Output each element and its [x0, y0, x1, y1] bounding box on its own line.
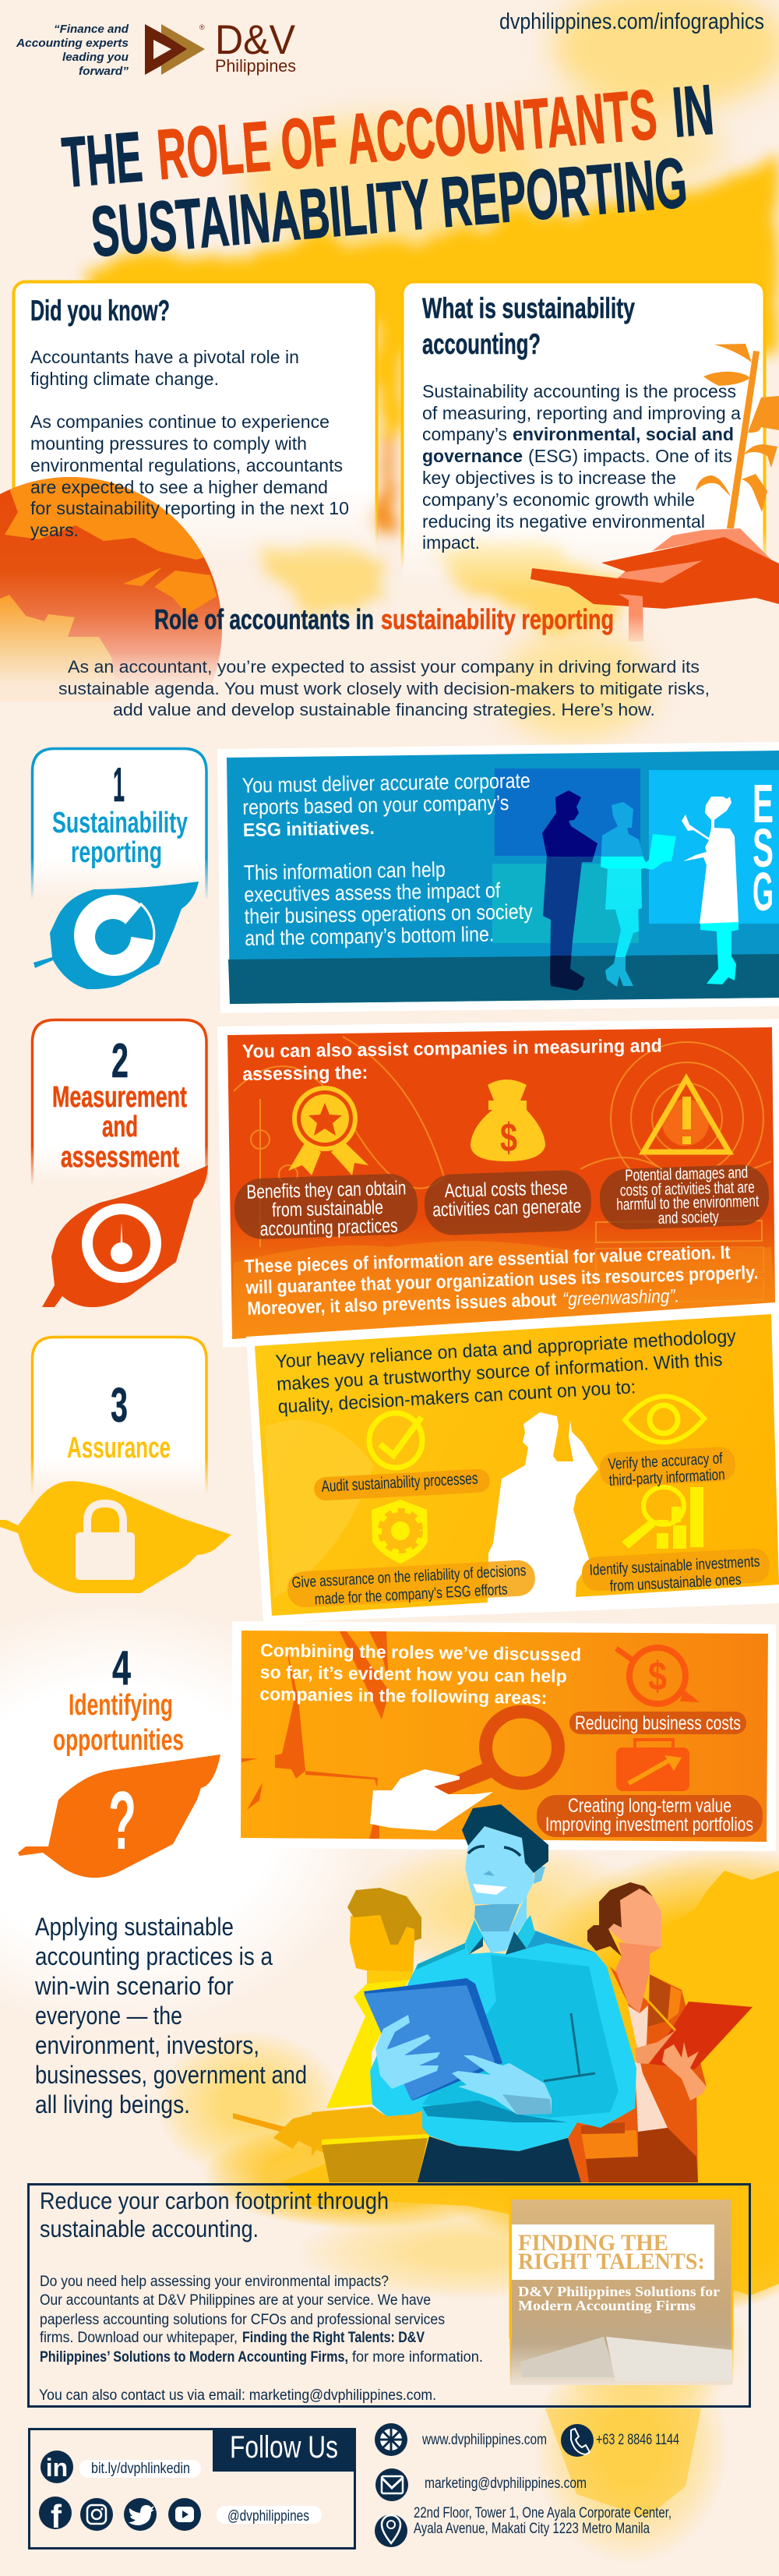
text: did you know: fighting climate change. — [30, 369, 219, 389]
panel: what is sustainability accounting card — [402, 282, 765, 610]
text: did you know: Did you know? — [30, 295, 170, 327]
closing statement — [34, 1913, 307, 2118]
pill: potential damages: and society — [657, 1208, 719, 1228]
icon: warning triangle — [643, 1079, 729, 1152]
person: main man in cyan shirt — [364, 1804, 636, 2182]
cta body: Finding the Right Talents: D&V — [242, 2330, 425, 2346]
panel 3 text — [275, 1326, 739, 1418]
heading: role of accountants: Role of accountants in — [154, 603, 374, 635]
cta body: Do you need help assessing your environmental impacts? — [40, 2274, 389, 2290]
icon: twitter — [124, 2498, 157, 2531]
text: what is sustainability accounting: environmental, social and — [513, 424, 734, 444]
decorative circuit lines — [234, 1037, 771, 1303]
whitepaper cover: Modern Accounting Firms — [518, 2298, 696, 2313]
cta body: for more information. — [352, 2349, 483, 2366]
panel 4: identifying opportunities — [232, 1621, 776, 1851]
panel 2 closing text: “greenwashing”. — [562, 1285, 680, 1310]
text: what is sustainability accounting: key objectives is to increase the — [422, 468, 676, 488]
section 4 heading: identifying opportunities: 4 — [112, 1641, 131, 1695]
panel: did you know card — [14, 282, 377, 594]
esg letters — [753, 773, 774, 922]
text: what is sustainability accounting — [422, 292, 741, 553]
icon: magnifier with bars — [622, 1487, 703, 1549]
pill: long-term value: Creating long-term value — [568, 1795, 731, 1817]
icon: orange leaf with question mark — [18, 1754, 220, 1878]
pill: verify: Verify the accuracy of — [608, 1450, 723, 1473]
figure: woman silhouette white — [682, 797, 738, 984]
section 1 tab: sustainability reporting: 1 — [113, 758, 125, 812]
whitepaper cover: FINDING THE — [518, 2230, 668, 2256]
cta body: You can also contact us via email: marketing@dvphilippines.com. — [39, 2387, 436, 2404]
whitepaper cover: RIGHT TALENTS: — [518, 2249, 705, 2274]
logo tagline: leading you — [62, 51, 129, 64]
figure: white silhouette — [488, 1412, 598, 1603]
cta heading: Reduce your carbon footprint through — [40, 2187, 389, 2214]
cta heading — [40, 2187, 389, 2242]
panel 2 closing text: Moreover, it also prevents issues about — [247, 1289, 557, 1320]
neck — [480, 1894, 527, 1952]
logo: D&V Philippines: Philippines — [215, 56, 296, 76]
panel 2: measurement and assessment — [217, 1019, 779, 1348]
panel 1 text: executives assess the impact of — [244, 878, 501, 906]
pants — [418, 2136, 581, 2182]
text: what is sustainability accounting: reducing its negative environmental — [422, 511, 705, 532]
panel 1 text — [242, 769, 534, 950]
section 3 tab: assurance: Assurance — [67, 1432, 171, 1465]
logo: D&V Philippines: ® — [199, 23, 205, 31]
section 4 heading: identifying opportunities — [53, 1641, 184, 1757]
panel 1 text: reports based on your company’s — [242, 791, 509, 819]
panel 2 heading: You can also assist companies in measuring and — [242, 1035, 662, 1062]
panel 4 text: so far, it’s evident how you can help — [260, 1662, 567, 1686]
icon: check circle — [369, 1413, 422, 1468]
icon: yellow leaf with lock — [0, 1481, 231, 1593]
contact: phone — [561, 2424, 679, 2457]
heading: role of accountants: sustainability reporting — [381, 603, 614, 635]
intro paragraph — [58, 657, 710, 719]
pill: identify — [581, 1548, 770, 1596]
panel: follow us — [30, 2428, 355, 2549]
contact: website — [375, 2423, 547, 2456]
cta body: Our accountants at D&V Philippines are at your service. We have — [40, 2292, 431, 2309]
section 2 tab: measurement and assessment: 2 — [111, 1034, 129, 1088]
icon: linkedin — [41, 2451, 73, 2483]
contact: email — [375, 2468, 587, 2501]
pill: actual costs: activities can generate — [432, 1195, 582, 1221]
panel 4 text: Combining the roles we’ve discussed — [260, 1640, 581, 1665]
cta body: paperless accounting solutions for CFOs and professional services — [40, 2312, 445, 2328]
contact: email: marketing@dvphilippines.com — [425, 2475, 587, 2492]
pill: long-term value — [537, 1795, 763, 1837]
head — [534, 1867, 545, 1884]
logo tagline: Accounting experts — [16, 37, 129, 50]
text: did you know: environmental regulations, accountants — [30, 455, 343, 475]
panel 4 text: companies in the following areas: — [259, 1684, 547, 1708]
contact: phone: +63 2 8846 1144 — [596, 2432, 679, 2448]
person: woman in orange jacket — [568, 1882, 753, 2182]
illustration: globe — [0, 468, 226, 701]
text: did you know: As companies continue to experience — [30, 412, 330, 432]
icon: red leaf with dial — [42, 1165, 208, 1307]
closing statement: accounting practices is a — [35, 1942, 273, 1970]
icon: linkedin: in — [46, 2454, 68, 2482]
person: yellow man — [233, 1888, 429, 2182]
panel 2 heading — [242, 1035, 662, 1085]
pill: benefits: from sustainable — [272, 1196, 383, 1221]
section 1 tab: sustainability reporting — [33, 748, 206, 904]
panel 3 text: Your heavy reliance on data and appropriate methodology — [275, 1326, 736, 1373]
text: what is sustainability accounting: governance — [422, 446, 523, 466]
icon: facebook — [39, 2496, 72, 2535]
panel 1 text: their business operations on society — [245, 900, 533, 928]
icon: shield with gear — [372, 1500, 428, 1564]
tablet — [364, 1978, 502, 2101]
panel 3: assurance — [246, 1303, 779, 1623]
panel 4 text — [259, 1640, 581, 1708]
text: what is sustainability accounting: impact. — [422, 532, 480, 553]
text: did you know: are expected to see a higher demand — [30, 477, 328, 497]
text: did you know: Accountants have a pivotal role in — [30, 347, 299, 367]
cta body: firms. Download our whitepaper, — [40, 2330, 238, 2346]
section 1 tab: sustainability reporting: Sustainability — [52, 807, 188, 839]
pill: audit — [313, 1468, 491, 1501]
icon: eye — [625, 1396, 704, 1443]
icon: blue leaf with gauge — [33, 882, 199, 989]
section 4 heading: identifying opportunities: Identifying — [69, 1689, 173, 1722]
icon: money bag: $ — [500, 1115, 517, 1161]
pill: give assurance: Give assurance on the reliability of decisions — [291, 1562, 527, 1592]
panel 1 text: This information can help — [244, 857, 446, 885]
icon: coin with down arrow: $ — [648, 1654, 667, 1699]
icon: magnifier — [432, 1712, 558, 1794]
pill: benefits — [234, 1173, 418, 1241]
section 3 tab: assurance: 3 — [111, 1379, 128, 1433]
closing statement: win-win scenario for — [34, 1972, 234, 2000]
icon: medal — [288, 1086, 368, 1175]
link: handle pill: @dvphilippines — [227, 2508, 309, 2525]
panel 1 text: You must deliver accurate corporate — [242, 769, 530, 797]
hand — [652, 528, 771, 560]
cta heading: sustainable accounting. — [40, 2215, 259, 2242]
pill: audit: Audit sustainability processes — [321, 1470, 478, 1496]
whitepaper cover — [510, 2198, 732, 2385]
text: what is sustainability accounting: of measuring, reporting and improving a — [422, 403, 741, 423]
logo tagline: “Finance and — [54, 23, 129, 36]
text: what is sustainability accounting: (ESG) impacts. One of its — [528, 446, 732, 466]
closing statement: Applying sustainable — [35, 1913, 234, 1941]
icon: facebook: f — [51, 2498, 62, 2535]
pill: verify: third-party information — [608, 1466, 725, 1489]
closing statement: all living beings. — [35, 2090, 190, 2118]
pill: actual costs: Actual costs these — [444, 1177, 568, 1202]
icon: orange leaf with question mark: ? — [108, 1775, 136, 1867]
section 2 tab: measurement and assessment: and — [102, 1111, 138, 1143]
section 3 tab: assurance — [33, 1337, 206, 1500]
contact: address — [375, 2505, 671, 2547]
intro paragraph: add value and develop sustainable financing strategies. Here’s how. — [113, 700, 655, 719]
panel: follow us: Follow Us — [230, 2430, 338, 2465]
panel 1: esg reporting — [217, 742, 779, 1013]
section 2 tab: measurement and assessment: Measurement — [52, 1081, 187, 1114]
text: what is sustainability accounting: company’s — [422, 424, 507, 444]
panel 2 closing text — [244, 1241, 759, 1320]
text: what is sustainability accounting: company’s economic growth while — [422, 489, 695, 510]
icon: instagram — [80, 2498, 113, 2531]
pill: give assurance: made for the company’s ESG efforts — [314, 1581, 508, 1608]
cta body — [39, 2274, 483, 2404]
icon: briefcase — [616, 1740, 689, 1791]
pill: actual costs — [424, 1169, 592, 1236]
figure: man silhouette — [542, 790, 597, 991]
icon: money bag — [471, 1080, 545, 1161]
contact: website: www.dvphilippines.com — [421, 2432, 547, 2448]
heading: role of accountants — [154, 603, 614, 635]
icon: white hand — [370, 1769, 493, 1831]
panel 1 text: ESG initiatives. — [243, 818, 375, 841]
closing statement: environment, investors, — [35, 2031, 259, 2059]
figure: woman silhouette blue — [601, 802, 676, 987]
panel 3 text: quality, decision-makers can count on you to: — [277, 1376, 636, 1418]
pill: benefits: accounting practices — [259, 1215, 398, 1240]
section 2 tab: measurement and assessment: assessment — [61, 1141, 179, 1174]
logo tagline: forward” — [79, 65, 129, 78]
text: what is sustainability accounting: What is sustainability — [422, 292, 635, 324]
pill: verify — [599, 1446, 736, 1489]
section 2 tab: measurement and assessment — [33, 1019, 206, 1189]
pill: benefits: Benefits they can obtain — [246, 1177, 407, 1203]
pill: give assurance — [287, 1560, 536, 1610]
panel: call to action — [28, 2184, 749, 2407]
section 4 heading: identifying opportunities: opportunities — [53, 1724, 184, 1757]
logo: D&V Philippines — [145, 17, 296, 76]
icon: youtube — [168, 2498, 201, 2531]
contact: address: 22nd Floor, Tower 1, One Ayala Corporate Center, — [414, 2505, 671, 2521]
text: what is sustainability accounting: accounting? — [422, 328, 541, 360]
panel 2 closing text: These pieces of information are essential for value creation. It — [244, 1242, 731, 1277]
text: what is sustainability accounting: Sustainability accounting is the process — [422, 381, 736, 401]
panel 2 heading: assessing the: — [242, 1062, 368, 1085]
title: THE — [59, 118, 145, 203]
illustration: three professionals — [233, 1804, 753, 2182]
text: did you know: years. — [30, 520, 79, 540]
closing statement: everyone — the — [35, 2002, 182, 2030]
cta body: Philippines’ Solutions to Modern Accounting Firms, — [40, 2349, 348, 2366]
logo: D&V Philippines: D&V — [215, 17, 296, 63]
contact: address: Ayala Avenue, Makati City 1223 Metro Manila — [414, 2521, 650, 2537]
text: did you know: for sustainability reporting in the next 10 — [30, 498, 349, 518]
panel 3 text: makes you a trustworthy source of information. With this — [276, 1349, 723, 1395]
link: linkedin pill: bit.ly/dvphlinkedin — [91, 2461, 190, 2477]
hands — [375, 2015, 440, 2089]
intro paragraph: sustainable agenda. You must work closely with decision-makers to mitigate risks, — [58, 679, 710, 698]
logo tagline — [16, 23, 129, 78]
text: did you know: mounting pressures to comply with — [30, 433, 307, 454]
title: IN — [670, 71, 717, 153]
whitepaper cover: D&V Philippines Solutions for — [518, 2284, 720, 2299]
plant — [696, 344, 779, 528]
closing statement: businesses, government and — [35, 2061, 307, 2089]
icon: coin with down arrow — [616, 1648, 700, 1704]
illustration: plant in hand — [530, 344, 779, 641]
pill: identify: from unsustainable ones — [609, 1571, 742, 1595]
yellow wash behind people — [280, 1871, 779, 2518]
panel 1 text: and the company’s bottom line. — [245, 922, 494, 950]
section 1 tab: sustainability reporting: reporting — [71, 836, 162, 869]
pill: potential damages — [599, 1164, 770, 1231]
text: did you know — [30, 295, 349, 540]
intro paragraph: As an accountant, you’re expected to assist your company in driving forward its — [68, 657, 700, 677]
